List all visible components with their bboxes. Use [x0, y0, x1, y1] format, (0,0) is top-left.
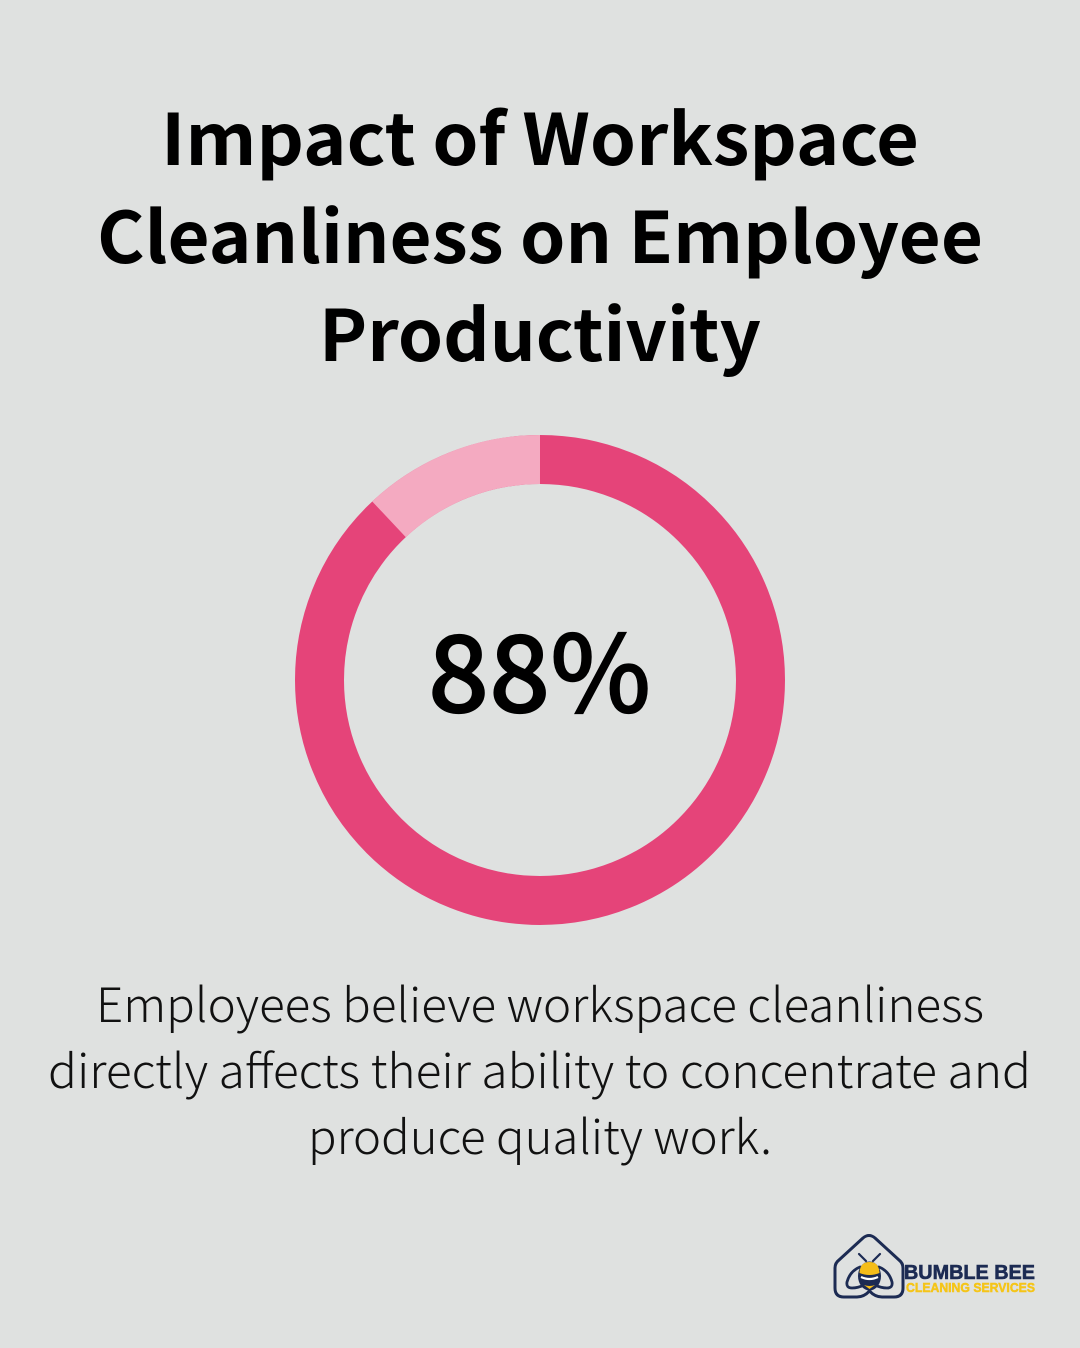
title: Impact of Workspace: [161, 84, 919, 186]
description text: Employees believe workspace cleanliness: [96, 967, 984, 1036]
description text: directly affects their ability to concentrate and: [48, 1033, 1031, 1102]
description text: [48, 967, 1031, 1168]
percentage value: 88%: [428, 589, 651, 743]
title: [97, 84, 983, 382]
title: Productivity: [319, 280, 761, 382]
icon: house outline with bee: [835, 1236, 903, 1297]
logo tagline: CLEANING SERVICES: [906, 1281, 1035, 1295]
description text: produce quality work.: [308, 1099, 772, 1168]
title: Cleanliness on Employee: [97, 182, 983, 284]
logo: Bumble Bee Cleaning Services: [835, 1236, 1035, 1297]
logo wordmark: BUMBLE BEE: [904, 1262, 1035, 1284]
donut chart: 88%: [320, 460, 760, 900]
